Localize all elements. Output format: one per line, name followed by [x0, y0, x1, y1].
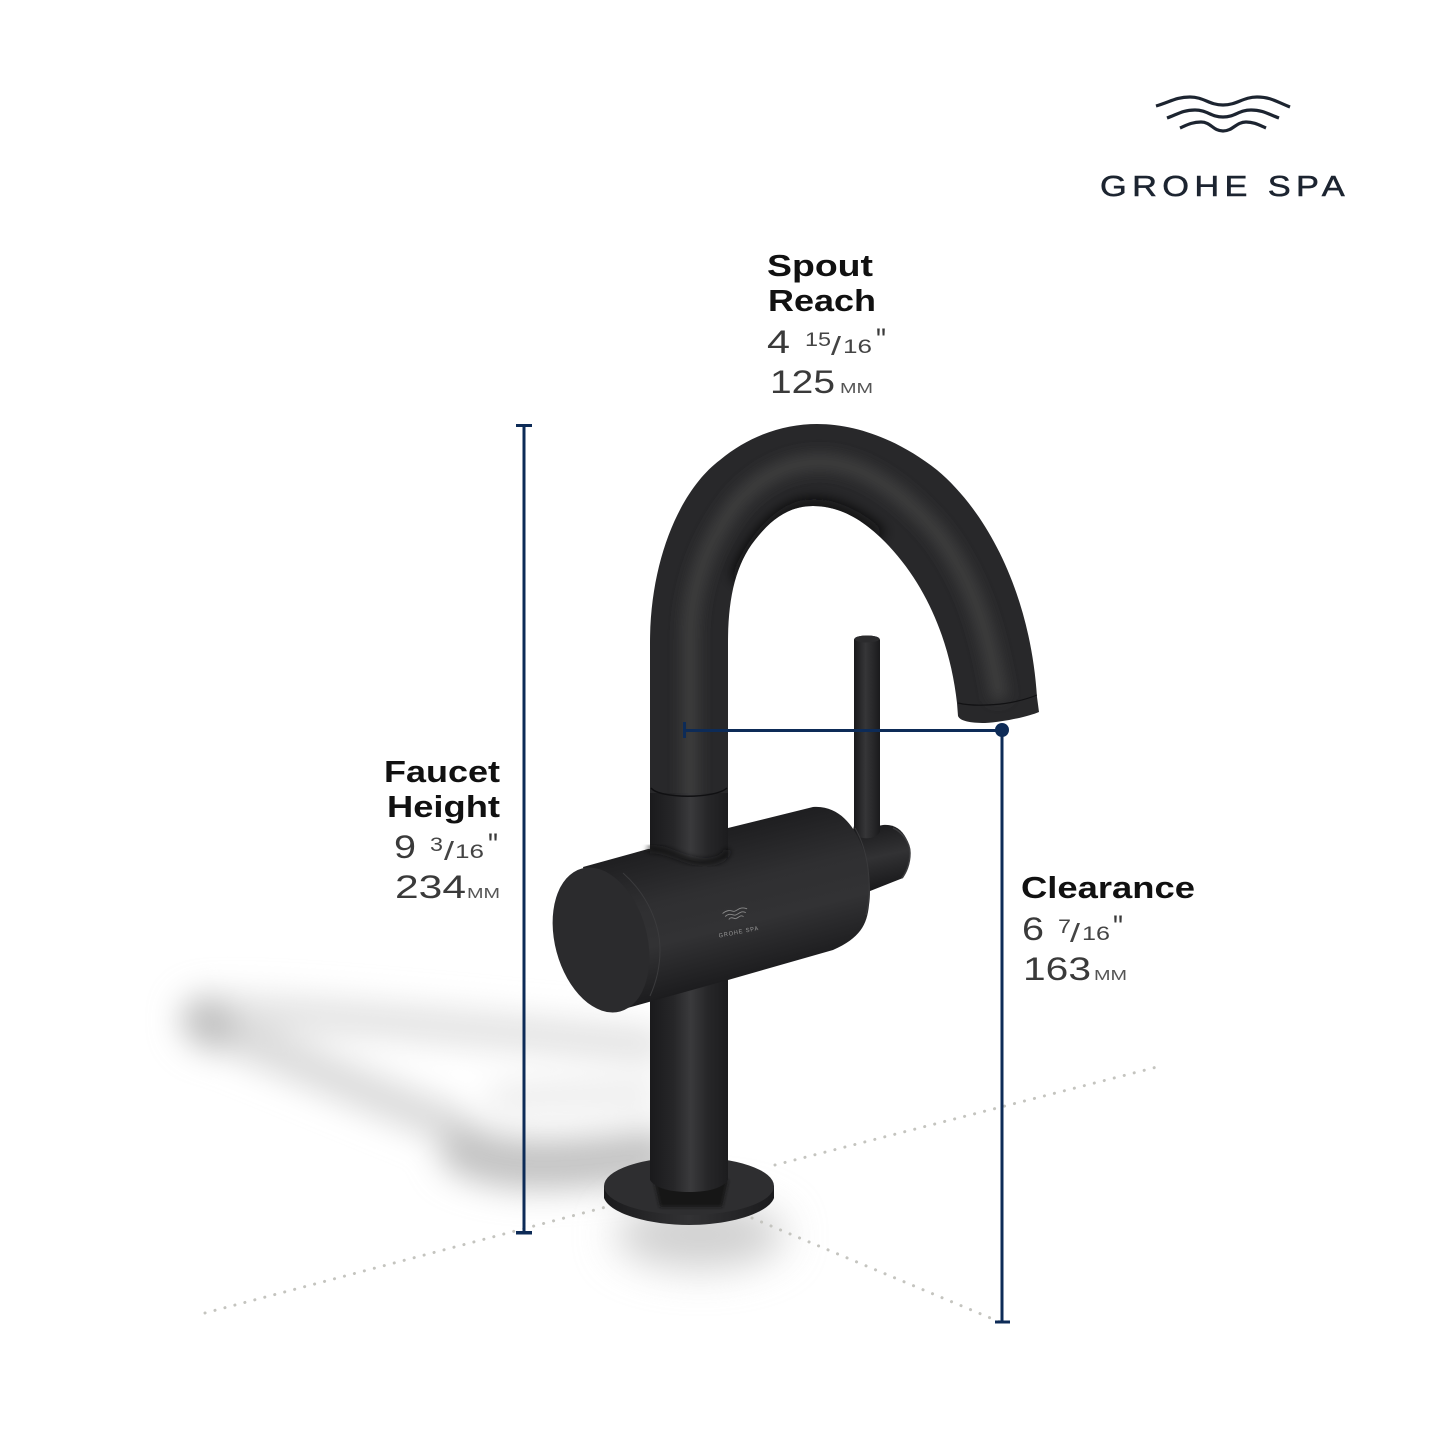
- label: clearance: 7: [1058, 917, 1071, 938]
- label: faucet height: Height: [387, 789, 500, 824]
- engraved waves: [722, 907, 749, 921]
- label: faucet height: 16: [455, 842, 484, 863]
- engraved wordmark: GROHE SPA: [718, 926, 760, 940]
- logo wordmark: GROHE SPA: [1100, 171, 1350, 203]
- label: spout reach: 4: [767, 324, 790, 360]
- label: faucet height: Faucet: [384, 754, 500, 789]
- label: clearance: /: [1070, 918, 1081, 948]
- label: clearance: [1021, 870, 1195, 987]
- icon: waves: [1156, 97, 1290, 131]
- label: clearance: Clearance: [1021, 870, 1195, 905]
- label: faucet height: ": [488, 827, 498, 863]
- label: spout reach: MM: [840, 380, 873, 397]
- faucet: end cap seam: [623, 873, 660, 996]
- label: clearance: 16: [1082, 924, 1110, 945]
- label: faucet height: MM: [467, 885, 500, 902]
- shadow: faucet cast on wall: [205, 1012, 650, 1165]
- label: clearance: 163: [1023, 951, 1091, 987]
- floor shadows: [205, 1012, 785, 1269]
- dimension: faucet height bar: [516, 424, 532, 1234]
- faucet: base plate: [604, 1130, 774, 1225]
- label: spout reach: [767, 248, 886, 400]
- logo: Grohe Spa: [1100, 97, 1350, 203]
- label: faucet height: /: [444, 836, 455, 866]
- faucet: lever handle: [852, 636, 880, 838]
- label: spout reach: 15: [805, 330, 831, 351]
- faucet: gooseneck spout and riser: [650, 424, 1039, 810]
- faucet: lower pillar: [650, 965, 728, 1165]
- label: faucet height: [384, 754, 500, 905]
- dotted floor lines: [205, 1067, 1157, 1322]
- label: spout reach: ": [876, 322, 886, 358]
- label: faucet height: 234: [395, 869, 466, 905]
- label: clearance: ": [1113, 909, 1123, 945]
- label: spout reach: /: [831, 331, 842, 361]
- faucet: end cap: [537, 857, 665, 1023]
- faucet: engraved logo: [714, 906, 760, 940]
- label: clearance: 6: [1022, 911, 1044, 947]
- dimension: clearance bar: [995, 730, 1010, 1324]
- label: spout reach: 125: [770, 364, 835, 400]
- label: faucet height: 3: [430, 835, 443, 856]
- faucet: [537, 424, 1039, 1225]
- faucet: horizontal body: [537, 807, 870, 1023]
- faucet: swivel collar and riser: [650, 788, 728, 863]
- label: spout reach: Spout: [767, 248, 873, 283]
- dimension: spout reach bar: [683, 722, 1009, 738]
- faucet: right knob: [845, 825, 910, 895]
- label: faucet height: 9: [394, 829, 416, 865]
- label: spout reach: Reach: [768, 283, 876, 318]
- label: clearance: MM: [1094, 967, 1127, 984]
- shadow: under base: [615, 1201, 785, 1269]
- label: spout reach: 16: [843, 337, 872, 358]
